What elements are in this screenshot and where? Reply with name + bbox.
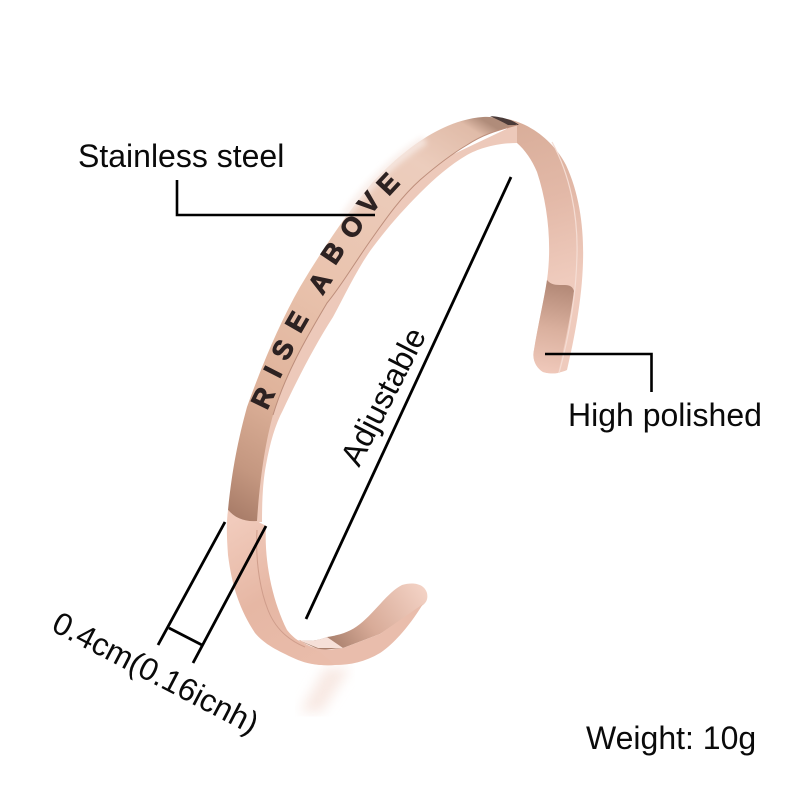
leader line: Stainless steel: [177, 180, 375, 215]
engraved text: RISE ABOVE: B: [315, 237, 351, 269]
bangle inner tail: [298, 584, 427, 650]
label: Stainless steel: Stainless steel: [78, 138, 284, 174]
bangle tail rim: [296, 604, 423, 665]
callout: Stainless steel: [78, 138, 375, 215]
engraved text: RISE ABOVE: E: [280, 307, 314, 337]
bangle right arm: [500, 118, 583, 373]
callout: Adjustable: [306, 177, 511, 619]
engraved text: RISE ABOVE: A: [302, 267, 338, 299]
label: Adjustable: Adjustable: [333, 322, 433, 471]
bangle lower front band: [227, 510, 335, 665]
rose gold cuff bangle: [227, 116, 583, 665]
weight label: Weight: 10g: [586, 720, 756, 756]
bangle rim: [240, 124, 517, 522]
dimension line: Adjustable: [306, 177, 511, 619]
bangle shadow: [300, 668, 350, 712]
engraved text: RISE ABOVE: I: [258, 362, 288, 382]
engraved text: RISE ABOVE: V: [352, 186, 386, 220]
bangle lower band edge line: [257, 530, 305, 647]
bangle face edge line: [273, 125, 517, 415]
callout: High polished: [545, 354, 762, 433]
engraved text: RISE ABOVE: R: [245, 383, 281, 413]
engraved text: RISE ABOVE: S: [266, 335, 300, 365]
bangle dark top reflection: [490, 116, 519, 125]
leader line: High polished: [545, 354, 652, 392]
engraved text: RISE ABOVE: O: [334, 210, 370, 244]
bangle inner tail highlight: [298, 637, 343, 648]
label: High polished: High polished: [568, 397, 762, 433]
dimension lines: [158, 522, 266, 663]
bangle engraved face: [228, 117, 517, 522]
bangle right arm rim line: [552, 142, 577, 373]
bangle pale reflection: [345, 140, 425, 216]
engraved text: RISE ABOVE: E: [371, 167, 405, 201]
callout: width dimension: [47, 522, 266, 741]
label: width: 0.4cm(0.16icnh): [47, 604, 265, 741]
engraved text: RISE ABOVE: [245, 167, 405, 413]
bangle right arm polished end: [533, 280, 574, 373]
